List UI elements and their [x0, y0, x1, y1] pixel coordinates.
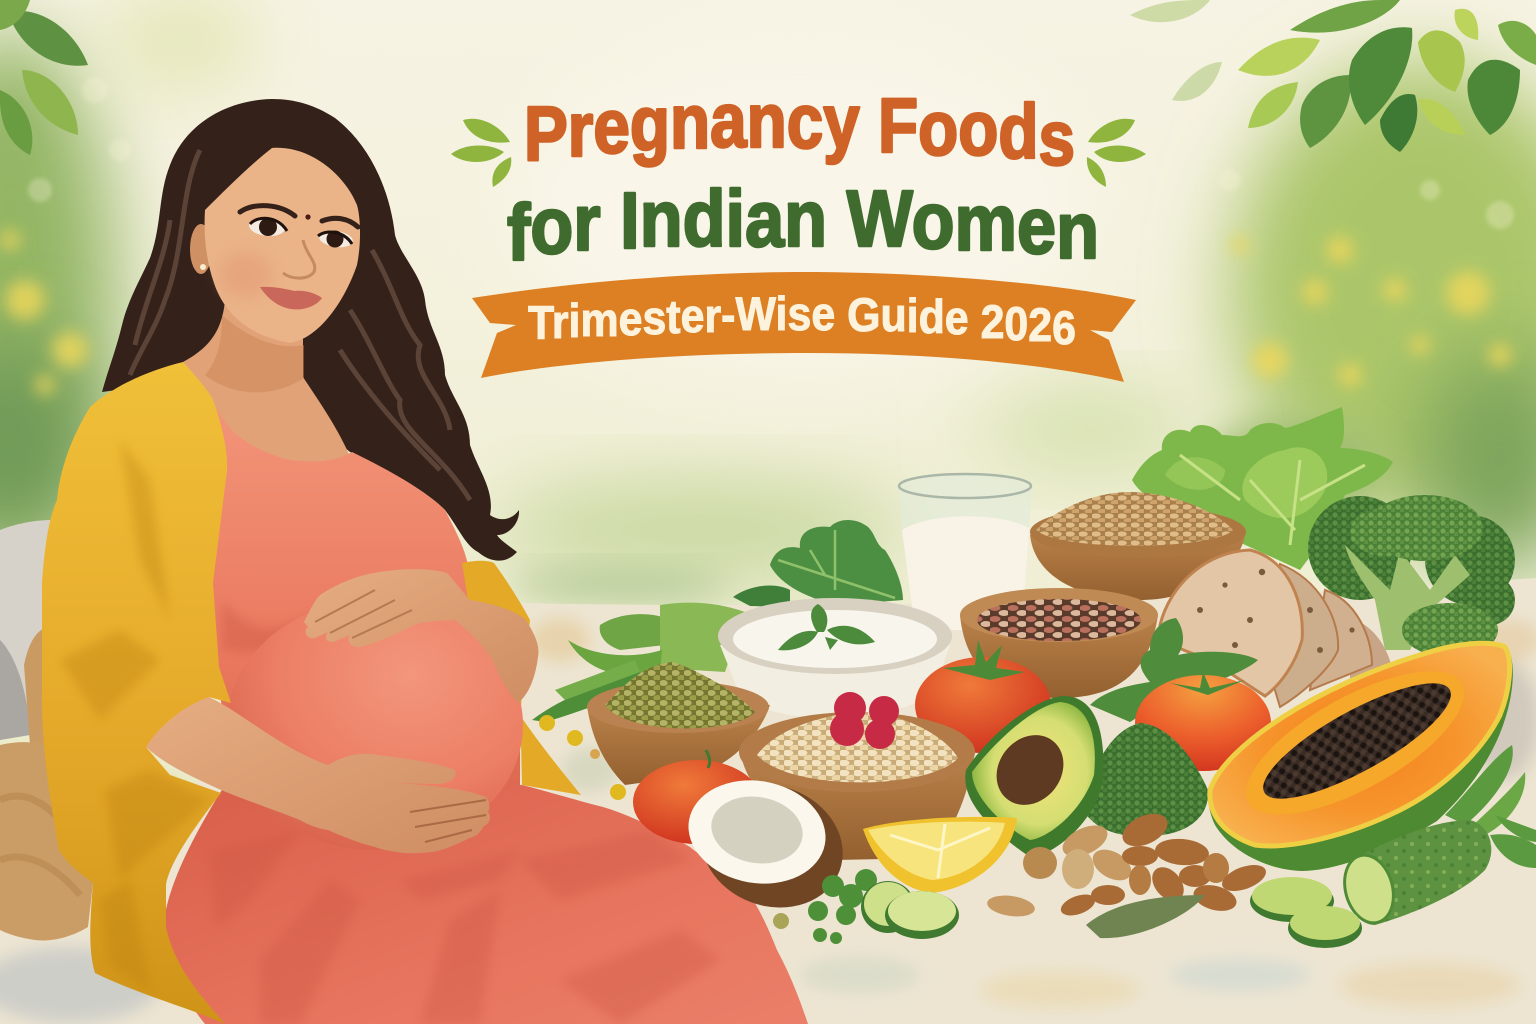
upper arm and hand [304, 569, 538, 703]
ribbon banner [472, 272, 1136, 382]
title: for Indian Women: for Indian Women [507, 174, 1099, 277]
eyes [248, 216, 354, 249]
title decoration: left leaves [451, 119, 511, 187]
food: apple [633, 750, 761, 844]
woman [42, 99, 808, 1024]
food: cucumber slices right [1250, 877, 1362, 948]
food: green pods [1445, 745, 1536, 868]
dress torso [213, 407, 520, 800]
neck and chest [183, 300, 356, 485]
belly [227, 600, 523, 850]
left shawl [42, 362, 231, 1024]
lips [260, 287, 322, 309]
food: lettuce [1132, 407, 1393, 570]
food: yellow seeds [539, 715, 626, 800]
skirt [164, 785, 808, 1024]
food: papaya [1208, 643, 1513, 871]
earring [200, 264, 206, 270]
leaves: top right [1130, 0, 1536, 152]
shawl folds [60, 440, 210, 990]
food: glass of milk [898, 474, 1032, 630]
subtitle text: Trimester-Wise Guide 2026 [528, 287, 1076, 354]
food: bowl of grains [1030, 492, 1246, 600]
lower arm and hand [146, 697, 490, 853]
food: cucumber slices centre [861, 881, 959, 939]
food: green peas [773, 869, 877, 944]
torso shading [222, 600, 320, 652]
upper finger lines [315, 590, 412, 638]
lower finger lines [410, 800, 486, 842]
title decoration: right leaves [1087, 119, 1146, 187]
leaves: top left [0, 0, 88, 155]
food: herb sprigs [1090, 618, 1258, 722]
food: large broccoli [1308, 495, 1515, 657]
hair [102, 99, 519, 561]
food: avocado [965, 696, 1103, 857]
food: leafy greens [733, 520, 903, 607]
food: cucumber [1336, 820, 1491, 930]
hair highlights [130, 150, 470, 500]
food: tomato upper [915, 640, 1051, 753]
skirt folds [210, 830, 720, 1024]
title: Pregnancy Foods: Pregnancy Foods [524, 78, 1075, 182]
bindi [305, 214, 311, 220]
pillows [0, 520, 93, 940]
food: herb garnish [1086, 895, 1205, 938]
food: coconut [680, 765, 860, 927]
food: okra and green vegetables [532, 603, 745, 722]
food: oats bowl with raspberries [739, 692, 975, 860]
ear [190, 224, 212, 274]
neck shadow [205, 315, 304, 392]
food: tomato right [1135, 672, 1271, 771]
food: yogurt bowl [718, 598, 952, 718]
food: bread slices [1160, 550, 1392, 707]
right shawl piece [462, 561, 581, 795]
nose [283, 240, 315, 278]
food: bowl of moong [587, 662, 770, 785]
eyebrows [240, 206, 358, 227]
face [205, 148, 360, 343]
cheeks [219, 253, 271, 297]
food: lemon [863, 817, 1017, 893]
food: bowl of beans [960, 588, 1158, 698]
food: mixed nuts [986, 807, 1269, 920]
cloth ground [0, 578, 1536, 1024]
food: small broccoli [1083, 723, 1208, 836]
